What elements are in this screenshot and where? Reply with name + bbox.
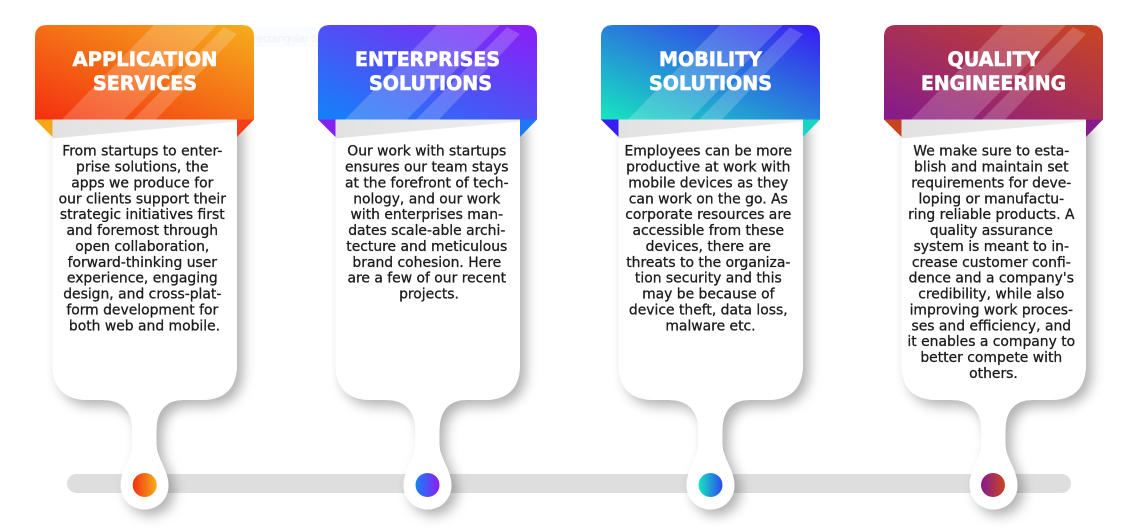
body text: at the forefront of tech- xyxy=(345,176,509,192)
body text: can work on the go. As xyxy=(629,192,788,208)
body text: We make sure to esta- xyxy=(913,144,1069,160)
body text: threats to the organiza- xyxy=(626,255,790,271)
panel: mobility solutions xyxy=(601,25,820,510)
body text: mobile devices as they xyxy=(628,176,788,192)
heading: MOBILITY xyxy=(659,48,763,71)
body text: projects. xyxy=(399,286,459,302)
body text: ring reliable products. A xyxy=(908,207,1075,223)
body text: tion security and this xyxy=(635,270,782,286)
heading: QUALITY xyxy=(948,48,1040,71)
card body with pin xyxy=(902,120,1086,510)
timeline dot xyxy=(698,473,722,497)
body text: and foremost through xyxy=(66,223,218,239)
watermark: faint label: Rectangular S xyxy=(249,33,319,45)
card body with pin xyxy=(52,120,237,510)
body text: requirements for deve- xyxy=(911,176,1071,192)
body text: brand cohesion. Here xyxy=(352,255,501,271)
header banner xyxy=(318,25,537,120)
body text: productive at work with xyxy=(626,160,790,176)
body text: with enterprises man- xyxy=(350,207,503,223)
body text: crease customer confi- xyxy=(912,255,1071,271)
body text: it enables a company to xyxy=(907,334,1075,350)
body text: loping or manufactu- xyxy=(918,192,1064,208)
body text: open collaboration, xyxy=(75,239,209,255)
timeline track xyxy=(67,474,1071,493)
body text: design, and cross-plat- xyxy=(63,286,221,302)
body text: may be because of xyxy=(642,286,776,302)
body text: accessible from these xyxy=(632,223,784,239)
fold and ears xyxy=(601,120,820,138)
fold and ears xyxy=(884,120,1103,138)
header light stripes xyxy=(345,25,520,120)
card body with pin xyxy=(336,120,520,510)
body text: dence and a company's xyxy=(909,270,1074,286)
body text: From startups to enter- xyxy=(62,144,222,160)
heading: SERVICES xyxy=(93,72,197,95)
body text: forward-thinking user xyxy=(68,255,217,271)
timeline dot xyxy=(133,473,157,497)
body text: device theft, data loss, xyxy=(629,302,788,318)
body text: apps we produce for xyxy=(71,176,214,192)
fold and ears xyxy=(35,120,254,138)
timeline dot xyxy=(416,473,440,497)
body text: tecture and meticulous xyxy=(346,239,507,255)
body text: ses and efficiency, and xyxy=(911,318,1071,334)
heading: ENGINEERING xyxy=(921,72,1066,95)
body text: ensures our team stays xyxy=(345,160,509,176)
body text: are a few of our recent xyxy=(347,270,507,286)
panel: quality engineering xyxy=(884,25,1103,510)
body text: strategic initiatives first xyxy=(60,207,225,223)
body text: form development for xyxy=(66,302,219,318)
body text: our clients support their xyxy=(59,192,226,208)
header light stripes xyxy=(62,25,237,120)
card body with pin xyxy=(618,120,803,510)
watermark: faint label xyxy=(232,27,319,47)
panel: enterprises solutions xyxy=(318,25,537,510)
heading: SOLUTIONS xyxy=(369,72,492,95)
body text: Our work with startups xyxy=(347,144,506,160)
body text: corporate resources are xyxy=(625,207,791,223)
header light stripes xyxy=(628,25,803,120)
body text: experience, engaging xyxy=(67,270,218,286)
heading: APPLICATION xyxy=(72,48,218,71)
body text: dates scale-able archi- xyxy=(348,223,505,239)
body text: better compete with xyxy=(920,350,1062,366)
timeline dot xyxy=(981,473,1005,497)
header light stripes xyxy=(911,25,1086,120)
fold and ears xyxy=(318,120,537,138)
header banner xyxy=(601,25,820,120)
heading: ENTERPRISES xyxy=(355,48,500,71)
header banner xyxy=(35,25,254,120)
panel: application services xyxy=(35,25,254,510)
body text: improving work proces- xyxy=(910,302,1073,318)
body text: nology, and our work xyxy=(353,192,500,208)
body text: Employees can be more xyxy=(624,144,792,160)
body text: credibility, while also xyxy=(918,286,1064,302)
body text: quality assurance xyxy=(930,223,1053,239)
body text: prise solutions, the xyxy=(76,160,209,176)
body text: others. xyxy=(969,366,1018,382)
body text: system is meant to in- xyxy=(914,239,1069,255)
header banner xyxy=(884,25,1103,120)
body text: malware etc. xyxy=(665,318,756,334)
body text: both web and mobile. xyxy=(69,318,220,334)
body text: devices, there are xyxy=(646,239,771,255)
body text: blish and maintain set xyxy=(914,160,1069,176)
heading: SOLUTIONS xyxy=(649,72,772,95)
